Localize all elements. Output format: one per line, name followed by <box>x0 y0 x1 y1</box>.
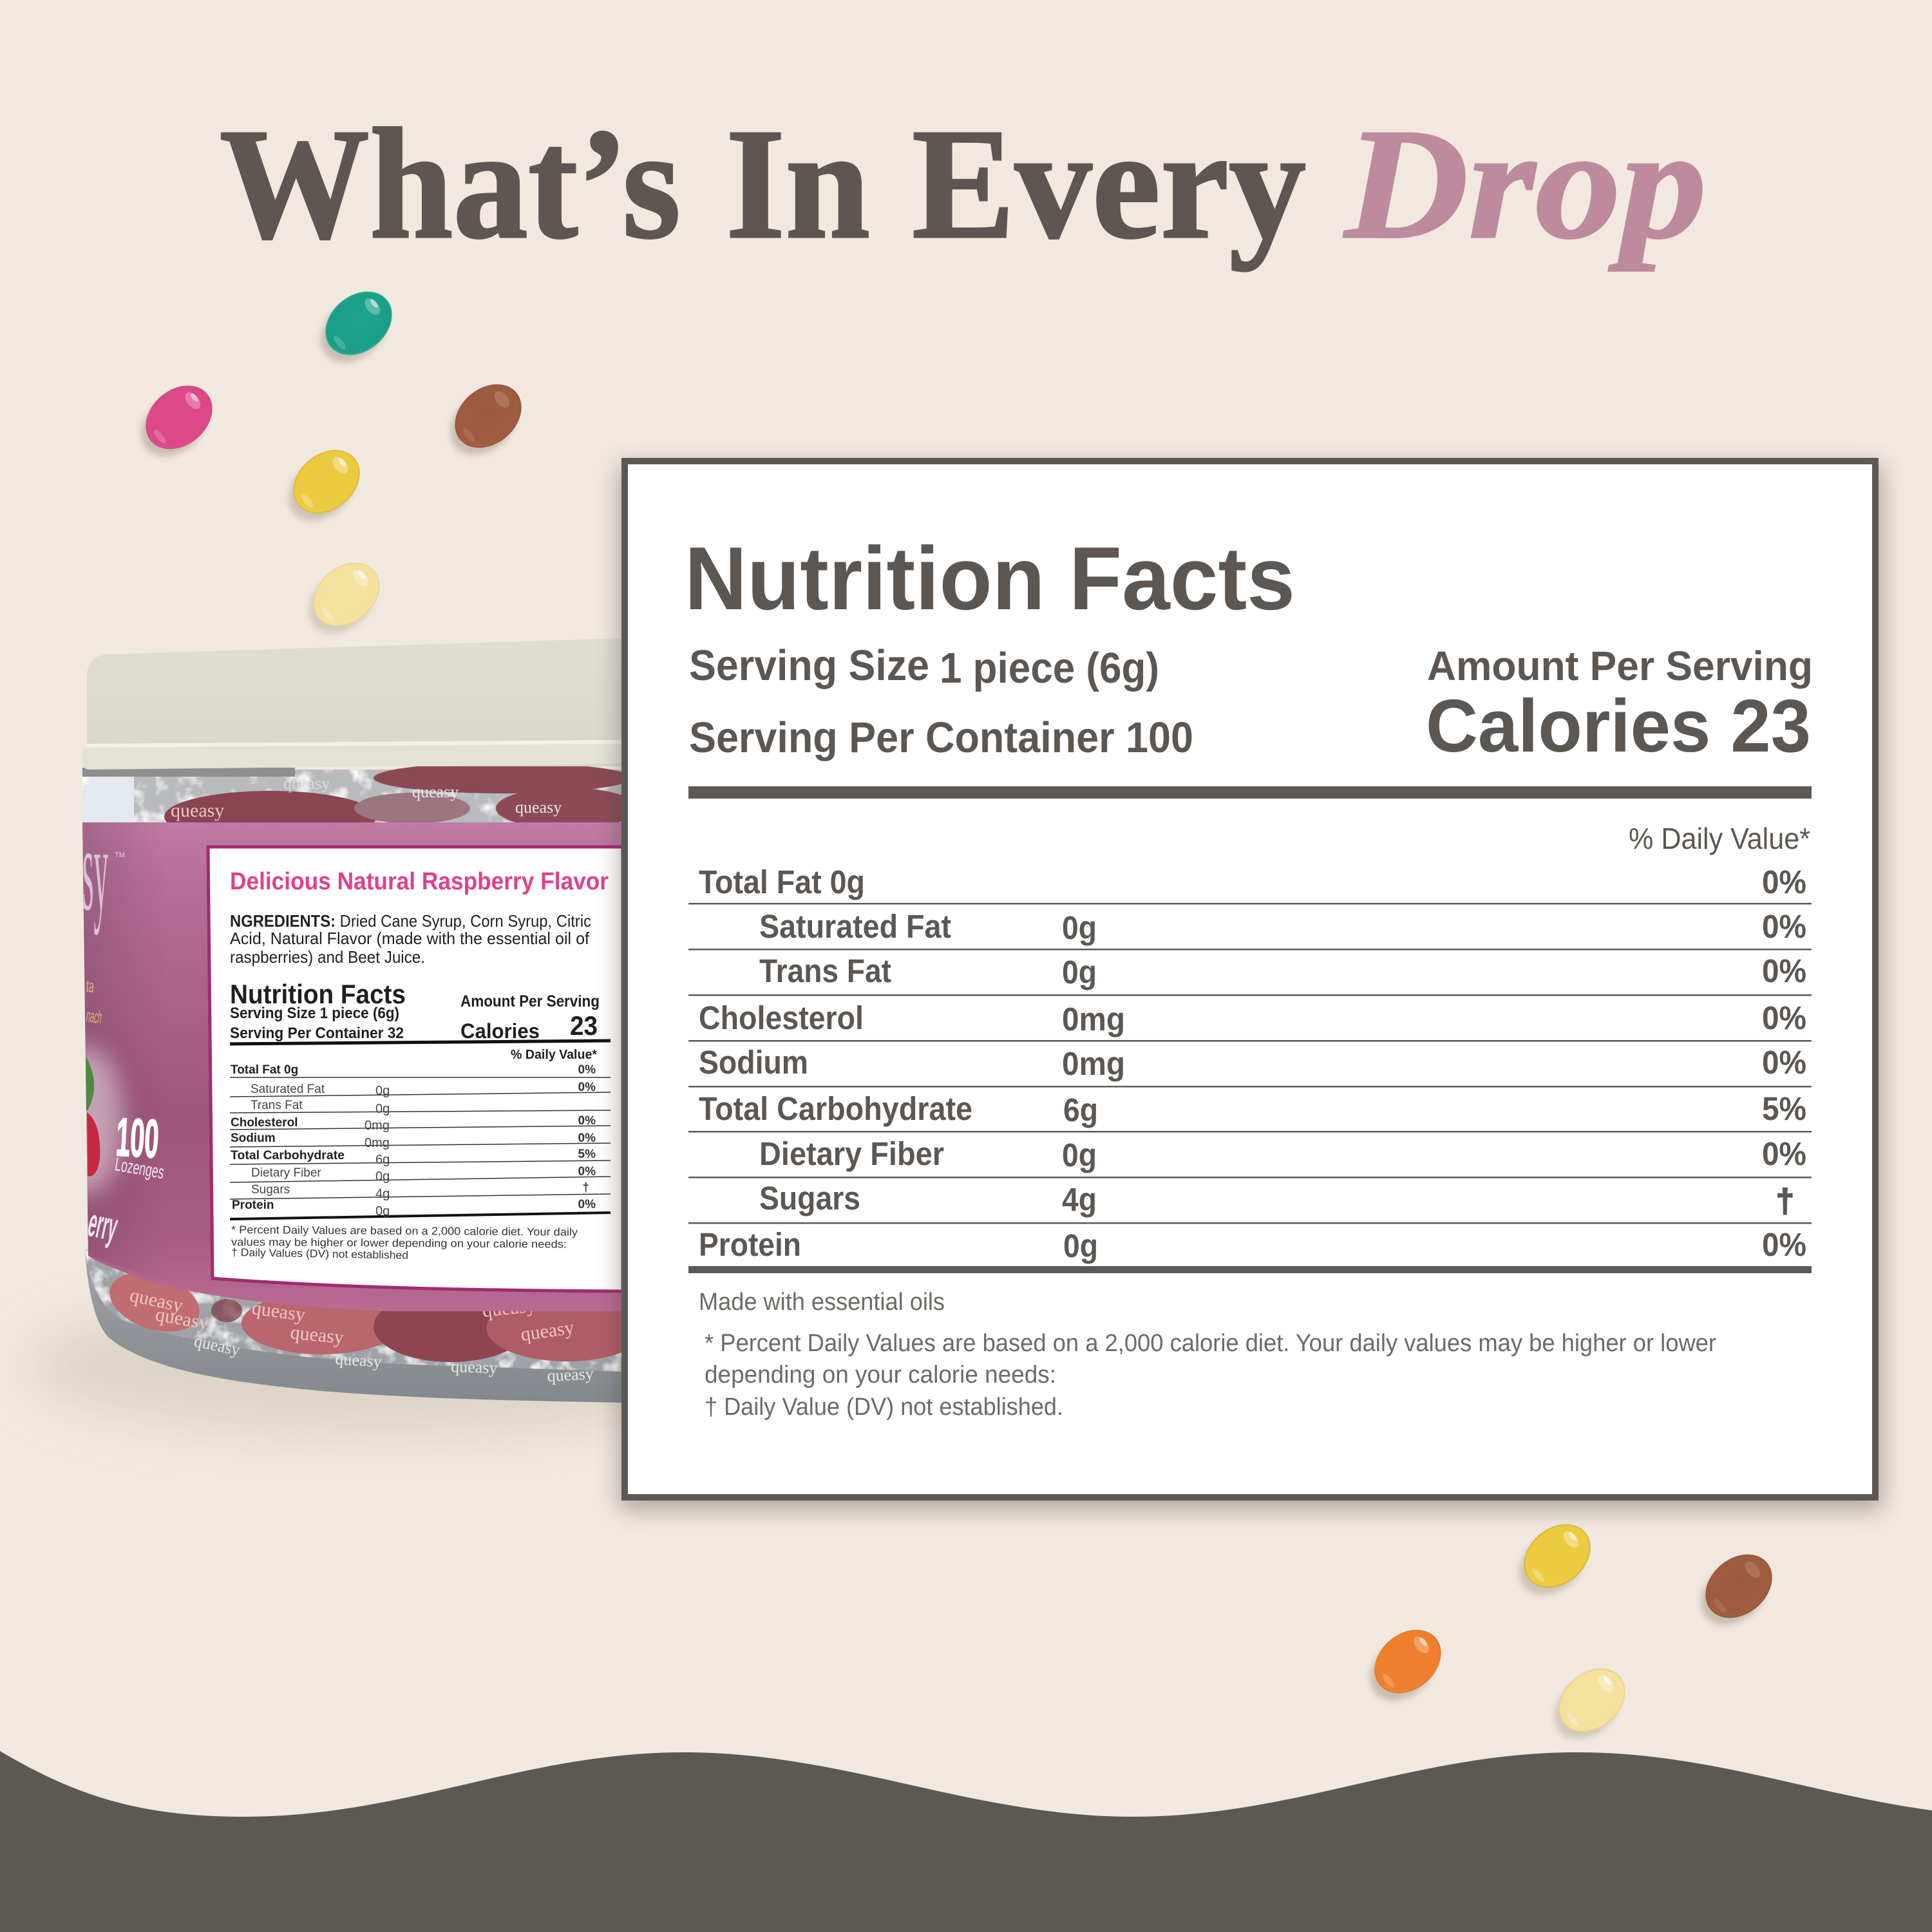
mini ingredients: NGREDIENTS: Dried Cane Syrup, Corn Syrup, Citric <box>230 911 591 931</box>
serving size: Serving Size <box>689 641 929 690</box>
jar neck and foil <box>82 770 623 824</box>
candy: brown <box>436 372 535 468</box>
mini nutrition heading: Serving Size 1 piece (6g) <box>230 1005 399 1022</box>
red candies at base: queasy <box>128 1285 185 1316</box>
row: sugars: 4g <box>1062 1181 1097 1218</box>
row: trans fat <box>759 952 1806 990</box>
mini table amounts: 4g <box>375 1187 390 1201</box>
row: protein: Protein <box>699 1226 801 1263</box>
mini nutrition heading: Calories <box>460 1019 540 1043</box>
row: saturated fat <box>759 908 1806 946</box>
footnotes <box>705 1330 1716 1421</box>
footnotes: * Percent Daily Values are based on a 2,000 calorie diet. Your daily values may be higher or lower <box>705 1330 1716 1357</box>
row: sodium: Sodium <box>699 1044 808 1081</box>
red candies at base: queasy <box>481 1294 537 1321</box>
mini table amounts: 0g <box>375 1084 390 1098</box>
mini table labels: Total Carbohydrate <box>231 1149 345 1162</box>
mini footnote: values may be higher or lower depending on your calorie needs: <box>231 1236 567 1251</box>
table rules <box>688 903 1812 1273</box>
serving size: 1 piece (6g) <box>940 644 1159 692</box>
row: sodium: 0% <box>1762 1044 1806 1081</box>
mini table labels: Dietary Fiber <box>251 1166 321 1180</box>
red candies at base: queasy <box>519 1317 575 1345</box>
red candies at neck: queasy <box>515 798 562 817</box>
jar label: 100 <box>115 1106 160 1169</box>
header rule <box>688 786 1812 799</box>
mini ingredients <box>230 911 591 967</box>
label tagline fragment: ta <box>85 976 95 996</box>
mini nutrition heading: Serving Per Container 32 <box>230 1025 404 1042</box>
footnotes: † Daily Value (DV) not established. <box>705 1394 1063 1421</box>
mini table percentages: 0% <box>578 1081 596 1094</box>
row: sugars: Sugars <box>759 1180 860 1217</box>
serving size <box>689 641 1159 692</box>
row: dietary fiber: 0% <box>1762 1135 1806 1172</box>
jar glass base <box>85 1249 621 1403</box>
mini table labels: Saturated Fat <box>251 1083 325 1096</box>
red candies at neck <box>164 766 621 822</box>
row: sodium: 0mg <box>1062 1045 1125 1082</box>
mini footnote: * Percent Daily Values are based on a 2,000 calorie diet. Your daily <box>231 1224 578 1238</box>
mini table percentages: 0% <box>578 1063 596 1077</box>
row: sugars <box>759 1180 1794 1219</box>
servings per container: Serving Per Container 100 <box>689 714 1193 762</box>
candy: brown lower <box>1687 1542 1785 1638</box>
panel shadow <box>620 465 1882 1510</box>
row: sodium <box>699 1044 1806 1082</box>
mini table percentages: 5% <box>578 1148 596 1161</box>
mini table amounts <box>365 1084 390 1218</box>
title: Every <box>912 97 1306 272</box>
row: cholesterol: 0mg <box>1062 1001 1125 1037</box>
jar ground shadow <box>30 1313 621 1446</box>
red candies at base: queasy <box>547 1364 594 1385</box>
red candies at base: queasy <box>154 1303 211 1334</box>
jar label <box>52 804 623 1311</box>
red candies at base: queasy <box>289 1321 345 1349</box>
row: total fat: Total Fat 0g <box>699 864 865 900</box>
jar <box>26 638 747 1436</box>
red candies at base: queasy <box>335 1349 383 1371</box>
row: cholesterol: Cholesterol <box>699 999 864 1036</box>
row: dietary fiber: 0g <box>1062 1137 1097 1173</box>
mini table labels <box>231 1063 345 1212</box>
row: saturated fat: 0% <box>1762 908 1806 945</box>
mini table labels: Protein <box>232 1198 274 1212</box>
foil wrappers at base <box>85 1249 623 1372</box>
candy: orange <box>1356 1618 1454 1713</box>
candy: pale yellow <box>294 551 393 646</box>
mini table labels: Total Fat 0g <box>231 1063 298 1077</box>
row: dietary fiber <box>759 1135 1806 1173</box>
jar lid <box>82 638 623 770</box>
row: trans fat: Trans Fat <box>759 952 891 989</box>
title: In <box>726 97 870 272</box>
mini table percentages: 0% <box>578 1114 596 1128</box>
mini table amounts: 0mg <box>365 1136 390 1150</box>
trademark mark: TM <box>115 851 125 859</box>
row: total carbohydrate <box>699 1090 1806 1128</box>
red candies at base: queasy <box>451 1357 498 1378</box>
row: total carbohydrate: Total Carbohydrate <box>699 1090 972 1127</box>
title <box>220 97 1707 272</box>
mini table percentages: 0% <box>578 1198 596 1211</box>
title: What’s <box>220 97 681 272</box>
mini table labels: Sodium <box>231 1132 276 1145</box>
row: total fat: 0% <box>1762 864 1806 900</box>
essential oils note: Made with essential oils <box>699 1289 945 1316</box>
candy: yellow <box>274 438 373 533</box>
red candies at base: queasy <box>251 1297 307 1326</box>
mini table amounts: 0g <box>375 1204 390 1218</box>
row: cholesterol <box>699 999 1806 1037</box>
row: protein <box>699 1226 1806 1264</box>
row: protein: 0g <box>1063 1227 1098 1264</box>
row: total carbohydrate: 6g <box>1063 1092 1098 1128</box>
bottom wave band <box>0 1751 1932 1932</box>
mini table percentages: 0% <box>578 1165 596 1179</box>
jar label: Lozenges <box>113 1154 166 1183</box>
row: saturated fat: 0g <box>1062 909 1097 946</box>
row: trans fat: 0% <box>1762 952 1806 989</box>
mini table amounts: 6g <box>375 1153 390 1167</box>
mini table rules <box>230 1041 611 1219</box>
mini table amounts: 0g <box>375 1102 390 1116</box>
mini heading: Delicious Natural Raspberry Flavor <box>230 868 609 895</box>
mini table percentages: 0% <box>578 1132 596 1145</box>
red candies at neck: queasy <box>283 774 330 793</box>
row: cholesterol: 0% <box>1762 999 1806 1036</box>
label glow behind fruit <box>85 1036 135 1206</box>
daily value header: % Daily Value* <box>1629 822 1810 855</box>
mini table percentages: † <box>582 1181 589 1195</box>
mini nutrition heading: 23 <box>570 1010 598 1041</box>
row: trans fat: 0g <box>1062 954 1097 990</box>
row: protein: 0% <box>1762 1226 1806 1263</box>
row: saturated fat: Saturated Fat <box>759 908 951 945</box>
red candies at base <box>109 1274 621 1385</box>
red candies at base: queasy <box>193 1332 242 1359</box>
panel: nutrition facts <box>625 461 1875 1497</box>
amount per serving: Amount Per Serving <box>1427 643 1813 689</box>
candy: yellow lower <box>1505 1512 1604 1607</box>
mini footnote <box>231 1224 578 1262</box>
mini nutrition heading: % Daily Value* <box>511 1048 597 1062</box>
mini ingredients: Acid, Natural Flavor (made with the essential oil of <box>230 929 590 948</box>
mini table percentages <box>578 1063 596 1211</box>
mini nutrition heading: Amount Per Serving <box>460 992 600 1010</box>
raspberry illustration <box>86 1056 100 1176</box>
mini nutrition heading: Nutrition Facts <box>230 979 406 1009</box>
jar label: sy <box>82 804 108 936</box>
mini table amounts: 0g <box>375 1170 390 1184</box>
mini table labels: Trans Fat <box>251 1099 303 1112</box>
mini table labels: Sugars <box>251 1183 290 1197</box>
candy: pale yellow lower <box>1540 1656 1638 1752</box>
mini table amounts: 0mg <box>365 1119 390 1133</box>
jar label: nach <box>85 1005 103 1027</box>
row: dietary fiber: Dietary Fiber <box>759 1135 944 1172</box>
red candies at neck: queasy <box>412 782 459 801</box>
footnotes: depending on your calorie needs: <box>705 1361 1056 1388</box>
mini nutrition heading <box>230 979 600 1062</box>
calories: Calories 23 <box>1426 684 1811 768</box>
mini table labels: Cholesterol <box>231 1116 298 1130</box>
row: total fat <box>699 864 1806 900</box>
title: Drop <box>1343 97 1707 272</box>
red candies at neck: queasy <box>171 800 224 821</box>
jar label: erry <box>84 1200 122 1250</box>
mini footnote: † Daily Values (DV) not established <box>231 1246 408 1262</box>
mini ingredients: raspberries) and Beet Juice. <box>230 947 425 967</box>
candy: teal <box>307 279 405 375</box>
candy: pink <box>127 374 225 469</box>
row: sugars: † <box>1776 1182 1794 1219</box>
printed nutrition panel on jar <box>208 847 623 1291</box>
panel heading: Nutrition Facts <box>685 529 1295 629</box>
row: total carbohydrate: 5% <box>1762 1090 1806 1127</box>
